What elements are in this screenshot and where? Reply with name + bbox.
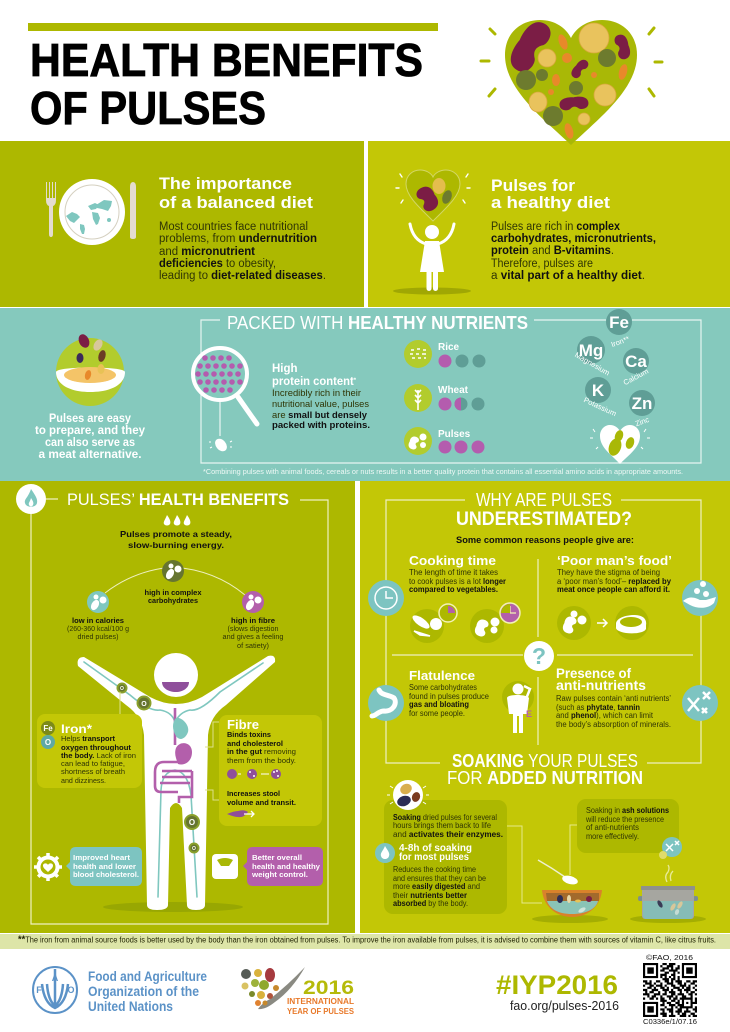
block: cooking time: compared to vegetables. [409, 585, 498, 594]
heading: soaking: SOAKING YOUR PULSES [452, 751, 638, 771]
text block: high protein content: nutritional value, pulses [272, 399, 369, 410]
text block: meat alternative: to prepare, and they [35, 425, 146, 437]
callout: soaking info: Reduces the cooking time [393, 865, 476, 874]
icon: white heart with beans [590, 425, 650, 464]
callout: weight control: health and healthy [252, 862, 321, 871]
text block: protein and B-vitamins. [491, 245, 614, 257]
logo: FAO: O [67, 985, 75, 995]
callout: iron: Fe [43, 724, 53, 733]
panel: packed with healthy nutrients [0, 308, 730, 481]
minerals: Ca [625, 352, 647, 371]
text block: deficiencies to obesity, [159, 258, 276, 270]
callout: weight control: weight control. [251, 870, 308, 879]
arc diagram [67, 560, 284, 650]
icon: pulses in circle [387, 780, 429, 810]
callout: iron: shortness of breath [61, 767, 125, 776]
text block: Most countries face nutritional [159, 221, 308, 233]
callout: fibre: volume and transit. [227, 798, 296, 807]
block: cooking time: Cooking time [409, 553, 496, 568]
arc diagram: of satiety) [237, 643, 269, 650]
block: poor man's food: ‘Poor man’s food’ [557, 553, 672, 568]
block: anti-nutrients: Raw pulses contain ‘anti nutrients’ [556, 694, 671, 703]
text block: meat alternative: can also serve as [45, 437, 135, 449]
block: cooking time: to cook pulses is a lot longer [409, 577, 506, 586]
block: poor man's food: a ‘poor man’s food’– replaced by [557, 577, 672, 586]
energy text: Pulses promote a steady, [120, 529, 232, 539]
icon: gear with heart [34, 853, 62, 881]
icon: question mark [524, 641, 554, 671]
chart: protein comparison [404, 340, 486, 455]
callout: iron: oxygen throughout [61, 743, 132, 752]
callout: fibre: Fibre [227, 717, 259, 732]
callout: soaking info [375, 780, 507, 914]
callout: fibre: Binds toxins [227, 730, 271, 739]
panel: why are pulses underestimated [360, 481, 730, 933]
arc diagram: (260-360 kcal/100 g [67, 626, 129, 633]
heading: PACKED WITH HEALTHY NUTRIENTS [227, 313, 528, 333]
block: flatulence [409, 668, 534, 733]
title: HEALTH BENEFITS [30, 34, 423, 86]
icon: fork, plate with world map, knife [46, 179, 136, 245]
intro: Some common reasons people give are: [456, 535, 634, 545]
oxygen cells [118, 684, 199, 852]
block: anti-nutrients [556, 666, 671, 729]
QR code [643, 964, 697, 1016]
logo: international year of pulses: INTERNATIONAL [287, 997, 354, 1006]
text block: high protein content: are small but densely [272, 410, 368, 421]
logo: international year of pulses: YEAR OF PULSES [287, 1007, 355, 1016]
minerals: Iron** [610, 334, 631, 349]
arc diagram: high in fibre [231, 618, 275, 625]
human body figure [78, 653, 275, 910]
callout: iron: the body. Lack of iron [61, 751, 136, 760]
rice row: Rice [438, 342, 460, 353]
icon: magnifying glass [193, 348, 257, 454]
pulses row: Pulses [438, 429, 471, 440]
organization name [88, 968, 207, 1014]
block: flatulence: Flatulence [409, 668, 475, 683]
block: anti-nutrients: the body’s absorption of minerals. [556, 720, 671, 729]
callout: weight control [243, 847, 323, 886]
callout: soaking info: for most pulses [399, 852, 469, 863]
text block: carbohydrates, micronutrients, [491, 233, 656, 245]
energy text: slow-burning energy. [128, 540, 224, 550]
block: anti-nutrients: (such as phytate, tannin [556, 703, 640, 712]
heading [491, 176, 610, 212]
minerals: Potassium [582, 395, 618, 418]
callout: ash solutions: more effectively. [586, 832, 639, 841]
logo: international year of pulses: 2016 [303, 978, 354, 999]
callout: fibre [219, 715, 322, 826]
panel: balanced diet [0, 141, 364, 307]
minerals: Calcium [622, 366, 650, 387]
connectors [120, 692, 219, 800]
callout: heart health: health and lower [73, 862, 136, 871]
copyright: ©FAO, 2016 [646, 954, 693, 962]
callout: soaking info: 4-8h of soaking [399, 843, 472, 854]
minerals [573, 309, 655, 464]
block: cooking time [409, 553, 520, 643]
heading: The importance [159, 174, 292, 193]
website: fao.org/pulses-2016 [510, 998, 619, 1013]
callout: soaking info: and ensures that they can be [393, 874, 486, 883]
text block: Pulses are rich in complex [491, 221, 621, 233]
block: poor man's food: They have the stigma of being [557, 568, 660, 577]
minerals: Mg [579, 341, 603, 360]
text block: high protein content: Incredibly rich in their [272, 388, 361, 399]
connectors [507, 825, 577, 903]
print code: C0336e/1/07.16 [643, 1019, 697, 1026]
callout: iron: Iron* [61, 722, 92, 736]
text block: and micronutrient [159, 246, 255, 258]
arc diagram: low in calories [72, 618, 124, 625]
text block: leading to diet-related diseases. [159, 270, 326, 282]
minerals: Magnesium [573, 350, 611, 377]
block: anti-nutrients: and phenol), which can limit [556, 711, 654, 720]
block: flatulence: for some people. [409, 709, 465, 718]
panel: healthy diet [368, 141, 730, 307]
minerals: Zinc [634, 415, 651, 428]
text block [159, 221, 326, 282]
text block: high protein content: High [272, 363, 298, 375]
icon: water drop [375, 843, 395, 863]
arc diagram: and gives a feeling [222, 634, 284, 641]
minerals: K [592, 381, 605, 400]
human body figure: O [120, 686, 124, 692]
heading: a healthy diet [491, 193, 610, 212]
text block: high protein content: * [354, 378, 357, 384]
callout: heart health: Improved heart [73, 853, 131, 862]
frame [201, 320, 701, 463]
heading: WHY ARE PULSES [476, 490, 612, 510]
logo: FAO [33, 967, 77, 1013]
callout: iron: can lead to fatigue, [61, 759, 125, 768]
callout: weight control: Better overall [252, 853, 302, 862]
callout: ash solutions [577, 799, 679, 853]
heading: UNDERESTIMATED? [456, 509, 632, 530]
wheat row: Wheat [438, 385, 469, 396]
icon: girl holding heart [393, 170, 471, 294]
block: cooking time: The length of time it takes [409, 568, 498, 577]
energy text [120, 529, 232, 550]
callout: iron: Helps transport [61, 734, 115, 743]
heading: soaking [447, 751, 643, 788]
callout: iron: and dizziness. [61, 776, 106, 785]
heading: PULSES’ HEALTH BENEFITS [67, 490, 289, 509]
icon: bowl of pulses [56, 333, 125, 406]
block: flatulence: gas and bloating [409, 700, 469, 709]
body shadow [103, 902, 243, 912]
callout: ash solutions: Soaking in ash solutions [586, 806, 670, 815]
callout: soaking info: Soaking dried pulses for several [393, 813, 497, 822]
human body figure: O [189, 818, 195, 827]
organization name: United Nations [88, 998, 173, 1014]
text block: meat alternative [35, 413, 146, 461]
icons: vegetables and pulses with clocks [410, 603, 520, 643]
logo: FAO: A [52, 973, 59, 983]
digestive system [155, 708, 192, 803]
text block: Therefore, pulses are [491, 258, 593, 270]
callout: soaking info: absorbed by the body. [393, 899, 468, 908]
block: poor man's food [557, 553, 672, 640]
circulatory system [84, 662, 263, 897]
title [30, 34, 423, 134]
callout: fibre: in the gut removing [227, 747, 296, 756]
icon: spoon [538, 860, 579, 886]
organization name: Food and Agriculture [88, 968, 207, 984]
callout: heart health: blood cholesterol. [73, 870, 139, 879]
icon: question mark: ? [532, 643, 546, 669]
callout: soaking info: more easily digested and [393, 882, 480, 891]
minerals: Zn [632, 394, 652, 413]
frame [386, 500, 701, 763]
icon: heart full of pulses [481, 17, 662, 145]
callout: soaking info: hours brings them back to life [393, 821, 492, 830]
header bar [28, 23, 438, 31]
callout: fibre: and cholesterol [227, 739, 283, 748]
text block: high protein content [272, 363, 370, 431]
text block: a vital part of a healthy diet. [491, 270, 645, 282]
panel: pulses' health benefits [0, 481, 355, 933]
icon: anti-nutrient crosses [682, 685, 718, 721]
text block [491, 221, 656, 282]
heading [159, 174, 313, 212]
callout: heart health [66, 847, 142, 886]
text block: problems, from undernutrition [159, 233, 317, 245]
text block: meat alternative: a meat alternative. [38, 449, 142, 461]
heading: of a balanced diet [159, 193, 313, 212]
frame [31, 499, 328, 924]
callout: fibre: them from the body. [227, 756, 296, 765]
block: anti-nutrients: Presence of [556, 666, 631, 681]
callout: fibre: Increases stool [227, 789, 280, 798]
block: poor man's food: meat once people can afford it. [557, 585, 670, 594]
text block: high protein content: protein content [272, 376, 356, 388]
arc diagram: carbohydrates [148, 598, 198, 605]
text block: high protein content: packed with proteins. [272, 420, 370, 431]
icon: cooking pot [630, 837, 706, 923]
hashtag: #IYP2016 [496, 970, 618, 1000]
heading: Pulses for [491, 176, 575, 195]
text block: meat alternative: Pulses are easy [49, 413, 132, 425]
icon: bowl with pulses [532, 890, 608, 923]
icon: stomach [368, 685, 404, 721]
icons: pulses to meat [557, 606, 649, 640]
block: anti-nutrients: anti-nutrients [556, 678, 646, 693]
human body figure: O [141, 701, 147, 708]
icon: three flames [164, 515, 190, 526]
callout: soaking info: and activates their enzymes. [393, 830, 503, 839]
human body figure: O [192, 846, 196, 852]
arc diagram: (slows digestion [228, 626, 279, 633]
icon: person with stomach ache: E [526, 709, 532, 719]
heading: soaking: FOR ADDED NUTRITION [447, 768, 643, 788]
block: flatulence: found in pulses produce [409, 692, 490, 701]
icon: hand with coins [682, 580, 718, 616]
organization name: Organization of the [88, 983, 199, 999]
arc diagram: dried pulses) [78, 634, 118, 641]
callout: ash solutions: will reduce the presence [585, 815, 664, 824]
callout: iron: O [45, 738, 51, 747]
icon: clock [368, 580, 404, 616]
logo: international year of pulses [241, 967, 355, 1016]
logo: FAO: F [36, 985, 42, 995]
heading [456, 490, 632, 530]
icon: weighing scale [212, 854, 238, 879]
footnote: *Combining pulses with animal foods, cereals or nuts results in a better quality protein that contains all essential amino acids in appropriate amounts. [203, 467, 683, 476]
callout: soaking info: their nutrients better [393, 891, 467, 900]
heart organ [173, 718, 188, 739]
callout: ash solutions: of anti-nutrients [586, 823, 639, 832]
arc diagram: high in complex [144, 590, 202, 597]
minerals: Fe [609, 313, 629, 332]
block: flatulence: Some carbohydrates [409, 683, 477, 692]
icon: flame [16, 484, 46, 514]
callout: iron [37, 714, 142, 788]
title: OF PULSES [30, 82, 266, 134]
